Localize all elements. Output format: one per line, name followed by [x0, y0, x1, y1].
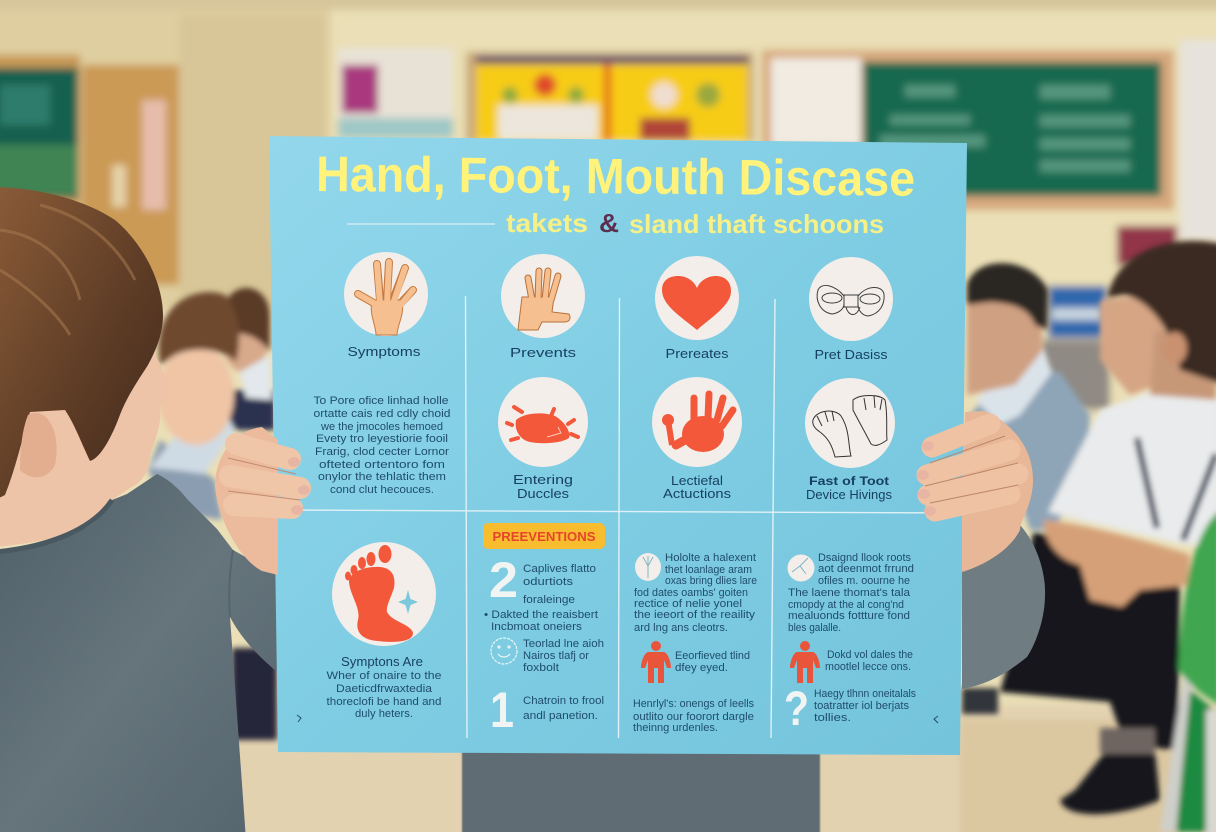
- icon: red blob: [498, 377, 588, 467]
- step 1 text: [523, 695, 604, 722]
- person behind poster: [462, 750, 820, 832]
- left paragraph: we the jmocoles hemoed: [320, 421, 443, 433]
- question text: Haegy tlhnn oneitalals: [814, 688, 916, 700]
- right hand holding poster: [917, 411, 1033, 572]
- head and neck skin: [0, 300, 169, 547]
- arrow right: [934, 716, 938, 723]
- column: prevention steps: [484, 552, 604, 738]
- icon: open hand: [344, 252, 428, 336]
- foot caption: duly heters.: [355, 708, 413, 720]
- paragraph: fod dates oambs' goiten: [634, 587, 748, 599]
- left paragraph: Evety tro leyestiorie fooil: [316, 433, 448, 445]
- person text: Eeorfieved tlind: [675, 650, 750, 662]
- label: fast of toot: Fast of Toot: [809, 474, 889, 488]
- grid dividers: [278, 296, 955, 738]
- closing text: outlito our foorort dargle: [633, 711, 754, 723]
- face step text: Teorlad lne aioh: [523, 638, 604, 650]
- label: entering duccles: Entering: [513, 472, 573, 487]
- left notice board: [0, 55, 80, 205]
- icon: red handprint: [652, 377, 742, 467]
- question text: tollies.: [814, 712, 851, 724]
- seated boy in blue-grey sweater: [962, 263, 1090, 714]
- paragraph: The laene thomat's tala: [788, 587, 911, 599]
- face step text: foxbolt: [523, 662, 559, 674]
- icon: heart: [655, 256, 739, 340]
- closing text: Henrlyl's: onengs of leells: [633, 698, 754, 710]
- closing text: theinng urdenles.: [633, 722, 718, 734]
- label: symptoms: Symptoms: [348, 344, 421, 359]
- sweater: [0, 474, 280, 832]
- paragraph: mealuonds fottture fond: [788, 610, 910, 622]
- paragraph: bles galalle.: [788, 622, 841, 634]
- left paragraph: onylor the tehlatic them: [318, 471, 446, 483]
- right wall paper: [1180, 40, 1216, 240]
- label: lectiefal actuctions: [663, 473, 732, 501]
- paragraph: ard lng ans cleotrs.: [634, 622, 728, 634]
- step 2 text: • Dakted the reaisbert: [484, 609, 598, 621]
- arrow left: [297, 715, 301, 722]
- icon: mask outline: [809, 257, 893, 341]
- sleeve fold: [229, 550, 233, 617]
- foot caption: Daeticdfrwaxtedia: [336, 683, 433, 695]
- label: entering duccles: [513, 472, 573, 501]
- icon: face: [491, 638, 517, 664]
- subtitle: &: [599, 208, 619, 238]
- left paragraph: ortatte cais red cdly choid: [314, 408, 450, 420]
- subtitle: sland thaft schoons: [629, 209, 884, 239]
- paragraph: rectice of nelie yonel: [634, 598, 742, 610]
- maroon chair: [1117, 226, 1177, 266]
- badge: preventions: [483, 523, 605, 549]
- green chair: [1160, 510, 1216, 832]
- hair strands: [0, 205, 135, 335]
- label: fast of toot: [806, 474, 892, 502]
- left paragraph: To Pore ofice linhad holle: [314, 395, 448, 407]
- poster sheet: [269, 136, 967, 755]
- step 2 text: Caplives flatto: [523, 563, 596, 575]
- person text: dfey eyed.: [675, 662, 728, 674]
- paragraph: ofiles m. oourne he: [818, 575, 910, 587]
- foreground boy: [0, 187, 280, 832]
- paragraph: cmopdy at the al cong'nd: [788, 599, 904, 611]
- question text: [814, 688, 916, 724]
- foot caption: [326, 654, 442, 720]
- icon: question mark: ?: [784, 683, 809, 736]
- paragraph: the ieeort of the reaility: [634, 609, 756, 621]
- wall poster: yellow board: [466, 52, 754, 142]
- person text: [675, 650, 750, 674]
- step 1 text: Chatroin to frool: [523, 695, 604, 707]
- number 2: 2: [489, 552, 518, 608]
- column: advice four: [784, 552, 916, 736]
- wall poster: notes: [338, 48, 453, 138]
- wooden door: [82, 65, 179, 285]
- child with brown hair: [148, 292, 277, 740]
- person text: [825, 649, 913, 673]
- icon: small emblem: [635, 553, 661, 581]
- blue box: [1048, 286, 1107, 338]
- foot caption: Wher of onaire to the: [326, 670, 442, 682]
- foot caption: Symptons Are: [341, 654, 423, 669]
- left paragraph: cond clut hecouces.: [330, 484, 434, 496]
- closing text: [633, 698, 754, 734]
- child with dark hair: [221, 288, 275, 430]
- number 1: 1: [490, 682, 514, 738]
- background children right: [962, 241, 1216, 832]
- step 2 text: [484, 563, 598, 633]
- label: fast of toot: Device Hivings: [806, 487, 892, 502]
- label: pret dasiss: Pret Dasiss: [814, 347, 888, 362]
- icon: foot: [332, 542, 436, 646]
- icon: small cracks: [788, 554, 814, 582]
- icon: side hand: [501, 254, 585, 338]
- person text: mootlel lecce ons.: [825, 661, 911, 673]
- label: entering duccles: Duccles: [517, 486, 570, 501]
- left paragraph: Frarig, clod cecter Lornor: [315, 446, 449, 458]
- ear: [20, 413, 57, 477]
- label: lectiefal actuctions: Lectiefal: [671, 473, 723, 488]
- green chalkboard with white sheet: [762, 50, 1174, 210]
- icon: person: [790, 641, 820, 683]
- left paragraph: [314, 395, 450, 496]
- paragraph: Hololte a halexent: [665, 552, 756, 564]
- subtitle: [347, 208, 884, 239]
- subtitle: takets: [506, 208, 588, 238]
- label: prereates: Prereates: [666, 346, 729, 361]
- right sleeve: [962, 525, 1045, 689]
- face step text: [523, 638, 604, 674]
- step 1 text: andl panetion.: [523, 710, 598, 722]
- title: Hand, Foot, Mouth Discase: [316, 146, 915, 207]
- paragraph: Dsaignd llook roots: [818, 552, 911, 564]
- paragraph: oxas bring dlies lare: [665, 575, 757, 587]
- hair: [0, 187, 163, 500]
- seated boy in white shirt: [1000, 241, 1216, 814]
- step 2 text: Incbmoat oneiers: [491, 621, 583, 633]
- paragraph: [788, 552, 914, 634]
- paragraph: [634, 552, 757, 634]
- question text: toatratter iol berjats: [814, 700, 910, 712]
- left paragraph: ofteted ortentoro fom: [319, 459, 445, 471]
- badge: preventions: PREEVENTIONS: [492, 529, 596, 544]
- label: lectiefal actuctions: Actuctions: [663, 486, 732, 501]
- step 2 text: foraleinge: [523, 594, 575, 606]
- collar: [0, 500, 112, 552]
- foot caption: thoreclofi be hand and: [326, 696, 442, 708]
- background children left: [148, 288, 277, 740]
- left hand holding poster: [215, 427, 310, 575]
- person text: Dokd vol dales the: [827, 649, 913, 661]
- column: advice three: [633, 552, 757, 734]
- paragraph: aot deenmot frrund: [818, 563, 914, 575]
- label: prevents: Prevents: [510, 345, 577, 360]
- paragraph: thet loanlage aram: [665, 564, 752, 576]
- icon: person: [641, 641, 671, 683]
- face step text: Nairos tlafj or: [523, 650, 589, 662]
- step 2 text: odurtiots: [523, 576, 574, 588]
- icon: two feet outline: [805, 378, 895, 468]
